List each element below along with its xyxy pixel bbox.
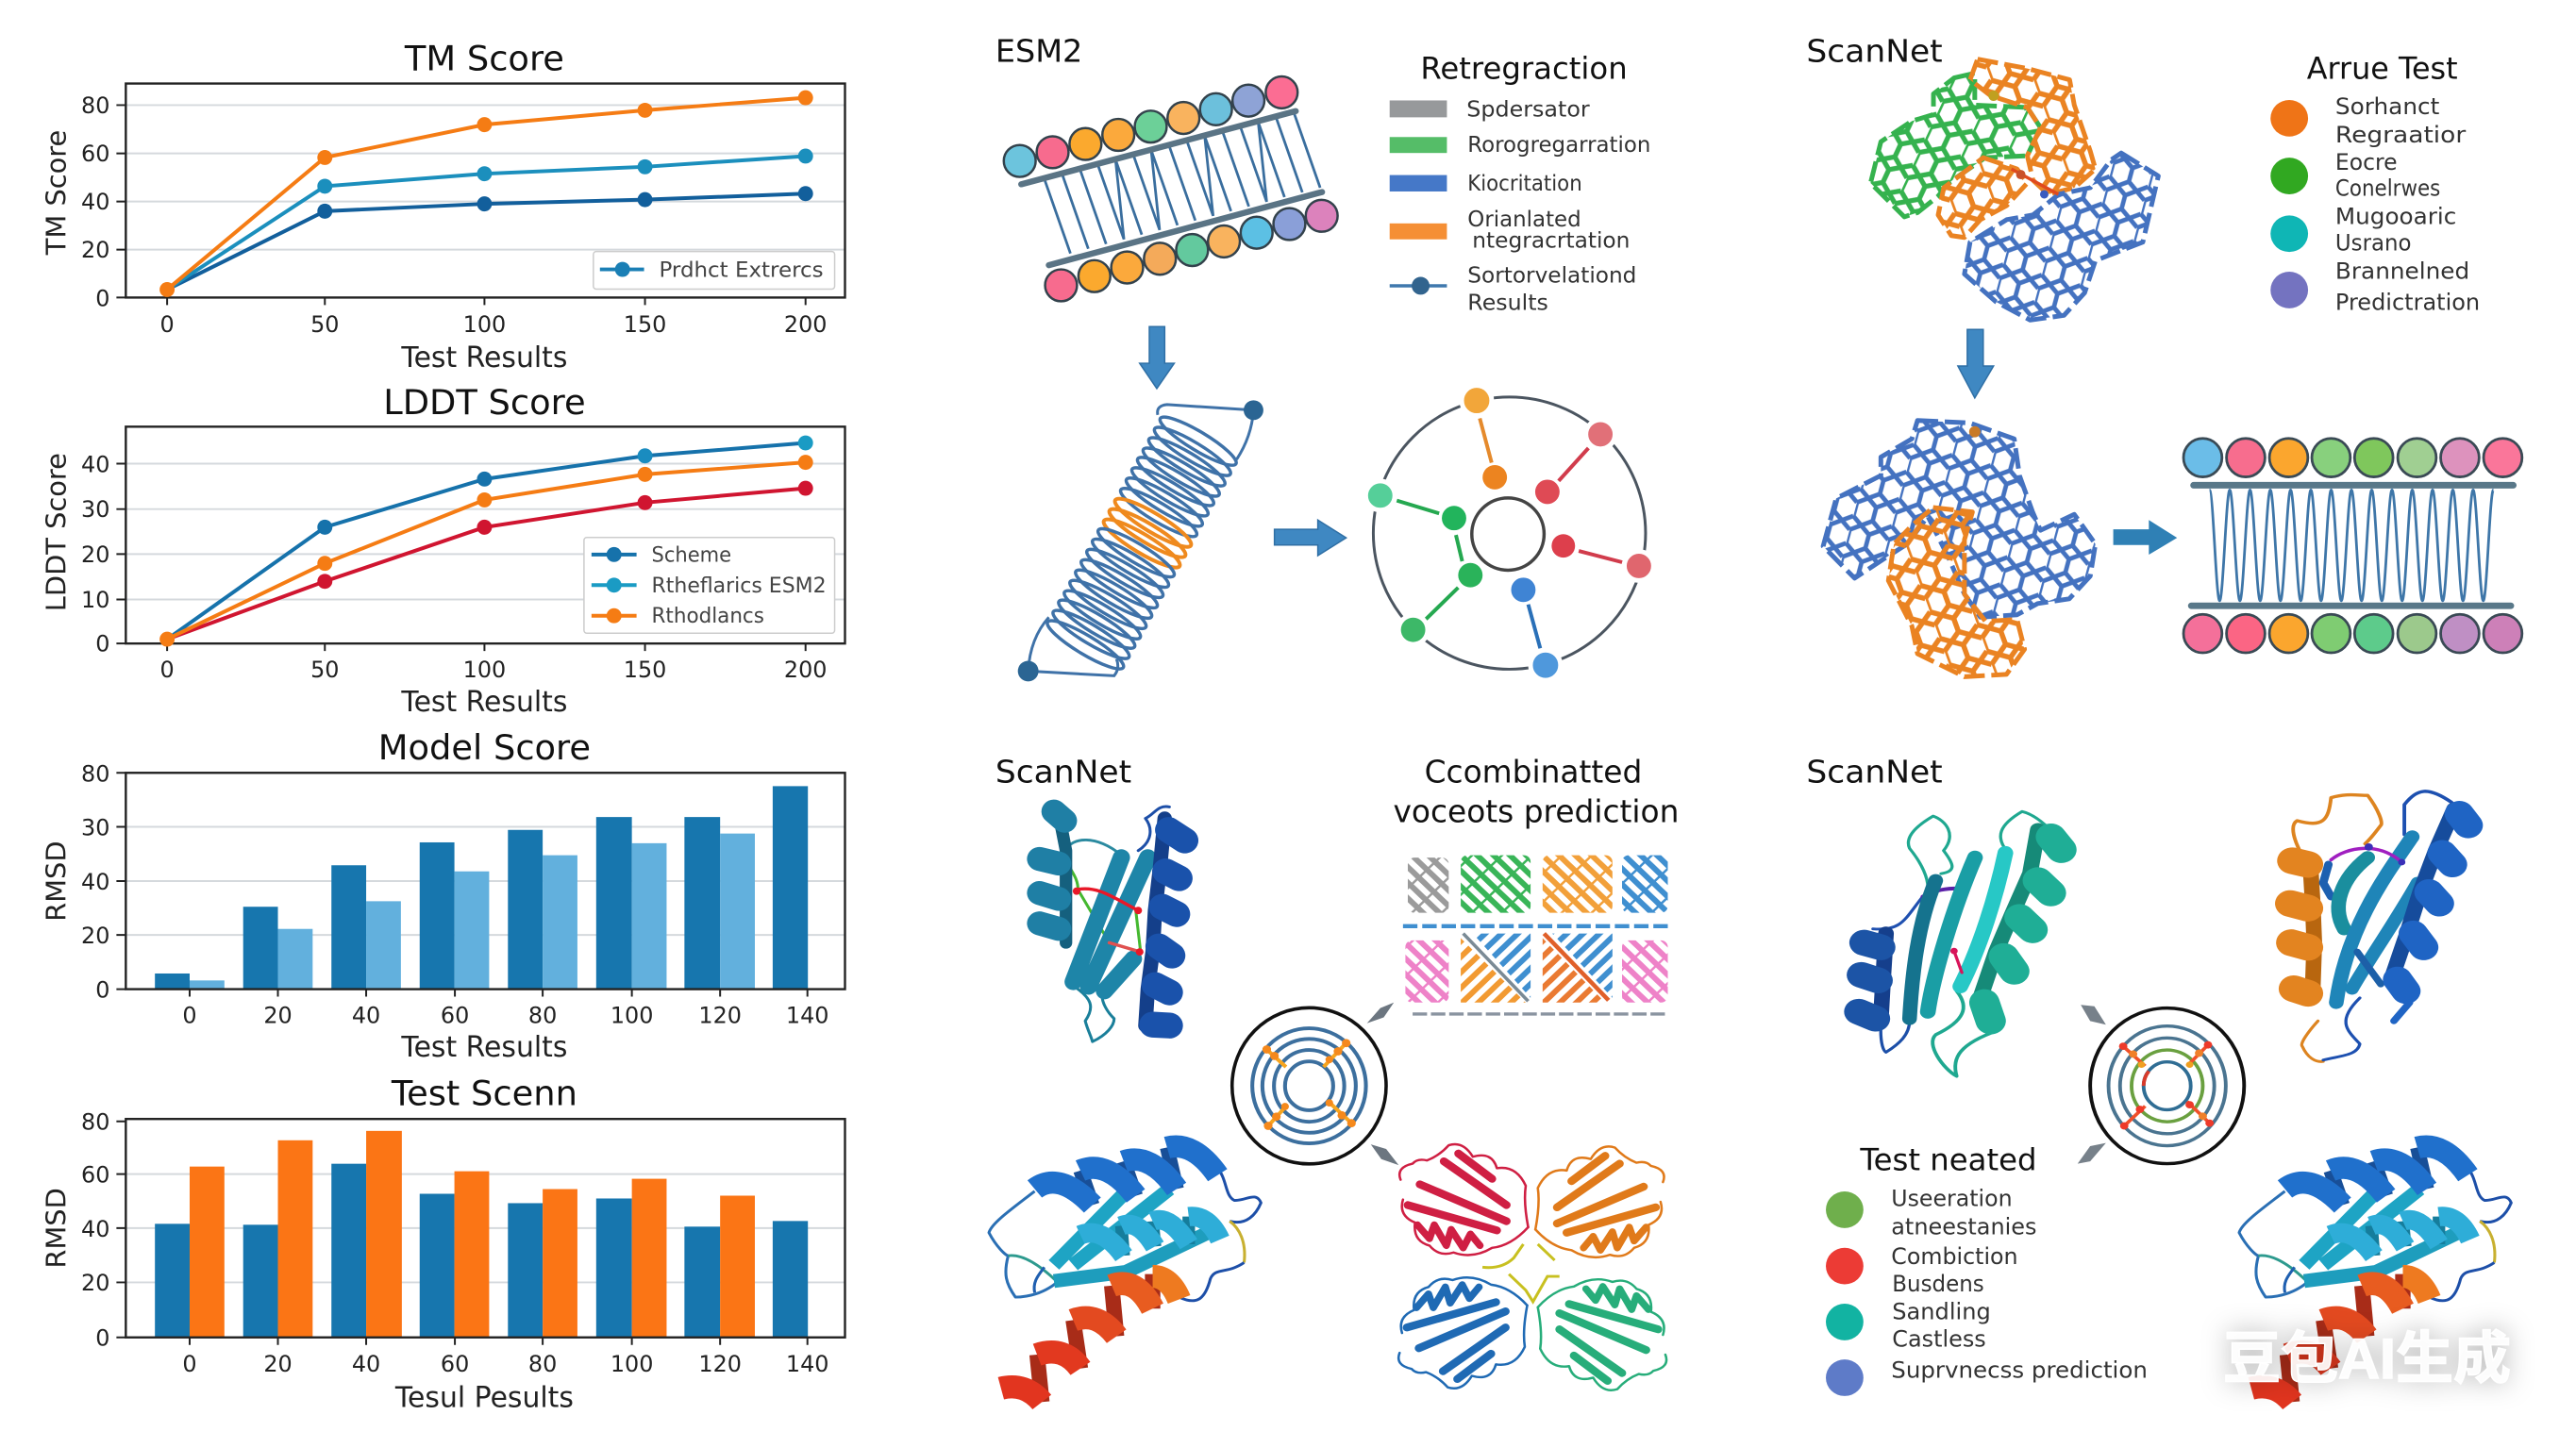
legend: Retregraction: Kiocritation bbox=[1467, 172, 1582, 196]
chart title: LDDT Score: LDDT Score bbox=[383, 382, 586, 423]
legend: Test neated: Busdens bbox=[1892, 1271, 1984, 1297]
chart legend bbox=[594, 252, 835, 289]
arrow: right bbox=[1275, 520, 1347, 556]
y axis tick labels: 10 bbox=[81, 587, 109, 613]
diagram: tilted bead ladder bbox=[1004, 76, 1338, 301]
y axis tick labels bbox=[81, 761, 109, 1004]
series: orange line bbox=[159, 455, 813, 647]
y axis tick labels bbox=[81, 1108, 109, 1352]
heading: Ccombinatted voceots prediction bbox=[1393, 755, 1679, 829]
protein ribbon: teal and blue sheet bbox=[1859, 811, 2062, 1076]
x axis tick labels: 200 bbox=[784, 311, 827, 338]
legend: Arrue Test: Arrue Test bbox=[2307, 51, 2458, 87]
panel: ESM2 pipeline bbox=[995, 34, 1653, 681]
legend: Arrue Test: Conelrwes bbox=[2335, 175, 2440, 201]
legend: Test neated: Sandling bbox=[1892, 1299, 1991, 1325]
heading: ScanNet: ScanNet bbox=[1806, 34, 1943, 70]
series: blue line bbox=[167, 436, 813, 640]
y axis tick labels: 60 bbox=[81, 141, 109, 167]
chart legend: Rthodlancs bbox=[652, 605, 764, 628]
y axis tick labels: 40 bbox=[81, 869, 109, 895]
arrow: down bbox=[1958, 329, 1994, 398]
legend: Retregraction: Retregraction bbox=[1420, 51, 1628, 87]
connector diamond: to tetramer bbox=[1371, 1144, 1398, 1165]
chart: Model Score bar chart bbox=[41, 727, 845, 1064]
legend: Test neated: Test neated bbox=[1859, 1142, 2037, 1178]
y axis tick labels: 0 bbox=[95, 977, 109, 1004]
x axis tick labels: 150 bbox=[624, 311, 666, 338]
x axis tick labels: 50 bbox=[310, 657, 339, 683]
x axis tick labels: 80 bbox=[528, 1351, 557, 1377]
chart legend: Scheme bbox=[652, 544, 731, 568]
panel: ScanNet combined voxel prediction bbox=[989, 755, 1679, 1402]
x axis label: Test Results bbox=[400, 686, 567, 719]
panel: ScanNet ribbons and Test neated bbox=[1806, 755, 2511, 1402]
legend: Test neated: Suprvnecss prediction bbox=[1891, 1357, 2148, 1384]
x axis tick labels: 140 bbox=[786, 1351, 828, 1377]
x axis tick labels: 60 bbox=[441, 1002, 469, 1028]
legend: Arrue Test: Predictration bbox=[2335, 289, 2480, 315]
protein tetramer bbox=[1398, 1144, 1666, 1390]
legend: Arrue Test: Usrano bbox=[2335, 230, 2412, 257]
series: orange line bbox=[159, 91, 813, 297]
x axis tick labels: 120 bbox=[698, 1351, 742, 1377]
blue bars bbox=[155, 1164, 808, 1338]
y axis tick labels: 0 bbox=[95, 1325, 109, 1352]
x axis tick labels: 100 bbox=[463, 657, 506, 683]
y axis tick labels: 40 bbox=[81, 451, 109, 477]
protein ribbon: teal and blue helices bbox=[1040, 807, 1185, 1041]
x axis tick labels: 0 bbox=[160, 311, 175, 338]
legend: Retregraction: Sortorvelationd bbox=[1467, 263, 1636, 288]
protein ribbon: orange and blue sheet bbox=[2290, 791, 2468, 1061]
legend: Arrue Test: Eocre bbox=[2335, 149, 2398, 175]
y axis tick labels: 20 bbox=[81, 237, 109, 263]
x axis tick labels: 80 bbox=[528, 1002, 557, 1028]
diagram: straight bead ladder bbox=[2183, 439, 2522, 653]
legend: Test neated: atneestanies bbox=[1891, 1214, 2037, 1240]
chart legend: Prdhct Extrercs bbox=[659, 259, 824, 283]
x axis tick labels: 20 bbox=[263, 1002, 293, 1028]
y axis tick labels: 20 bbox=[81, 1270, 109, 1296]
y axis tick labels: 0 bbox=[95, 285, 109, 311]
y axis tick labels: 40 bbox=[81, 1216, 109, 1242]
x axis tick labels bbox=[182, 1351, 828, 1377]
x axis tick labels: 140 bbox=[786, 1002, 828, 1028]
x axis tick labels: 120 bbox=[698, 1002, 742, 1028]
x axis tick labels: 0 bbox=[182, 1351, 197, 1377]
target rings icon bbox=[1232, 1007, 1386, 1164]
x axis tick labels: 0 bbox=[182, 1002, 197, 1028]
y axis tick labels: 20 bbox=[81, 541, 109, 568]
heading: ScanNet: ScanNet bbox=[995, 755, 1131, 791]
x axis tick labels: 40 bbox=[352, 1351, 380, 1377]
series: teal line bbox=[167, 149, 813, 290]
x axis tick labels: 100 bbox=[611, 1002, 653, 1028]
protein ribbon: blue, cyan and red copy bbox=[2239, 1146, 2511, 1402]
orange bars bbox=[190, 1131, 755, 1338]
diagram: multicolour protein mesh bbox=[1870, 59, 2158, 320]
diagram: blue and orange protein mesh bbox=[1823, 421, 2096, 676]
light blue bars bbox=[190, 834, 755, 990]
hatch tile grid bbox=[1403, 856, 1667, 1014]
connector diamond: upper bbox=[2081, 1005, 2106, 1024]
x axis tick labels: 60 bbox=[441, 1351, 469, 1377]
diagram: coil helix bbox=[1018, 400, 1263, 681]
legend: Retregraction: Results bbox=[1467, 291, 1548, 315]
connector diamond: lower bbox=[2078, 1143, 2106, 1164]
legend: Arrue Test: Brannelned bbox=[2335, 258, 2469, 285]
x axis tick labels: 20 bbox=[263, 1351, 293, 1377]
x axis tick labels bbox=[160, 311, 827, 338]
legend: Test neated: Useeration bbox=[1891, 1185, 2013, 1211]
arrow: right bbox=[2114, 520, 2177, 555]
legend: Arrue Test: Regraatior bbox=[2335, 122, 2466, 148]
x axis tick labels: 200 bbox=[784, 657, 827, 683]
x axis tick labels: 100 bbox=[611, 1351, 653, 1377]
x axis tick labels: 150 bbox=[624, 657, 666, 683]
chart: LDDT Score line chart bbox=[41, 382, 845, 719]
chart: Test Scenn bar chart bbox=[41, 1073, 845, 1414]
x axis label: Test Results bbox=[400, 341, 567, 374]
x axis tick labels bbox=[182, 1002, 828, 1028]
y axis label: LDDT Score bbox=[41, 453, 73, 611]
y axis tick labels: 20 bbox=[81, 923, 109, 949]
x axis label: Tesul Pesults bbox=[394, 1381, 574, 1414]
heading: ESM2: ESM2 bbox=[995, 34, 1082, 70]
legend: Arrue Test bbox=[2270, 51, 2480, 315]
x axis tick labels: 40 bbox=[352, 1002, 380, 1028]
x axis label: Test Results bbox=[400, 1031, 567, 1064]
y axis tick labels: 40 bbox=[81, 189, 109, 215]
y axis label: TM Score bbox=[41, 130, 73, 256]
legend: Retregraction: ntegracrtation bbox=[1472, 229, 1630, 254]
chart legend: Rtheflarics ESM2 bbox=[652, 574, 827, 598]
watermark: 豆包AI生成 bbox=[2223, 1327, 2511, 1390]
chart title: Test Scenn: Test Scenn bbox=[391, 1073, 577, 1113]
y axis tick labels: 80 bbox=[81, 761, 109, 788]
legend: Retregraction: Spdersator bbox=[1466, 97, 1590, 122]
legend: Arrue Test: Sorhanct bbox=[2335, 93, 2439, 120]
x axis tick labels bbox=[160, 657, 827, 683]
series: red line bbox=[167, 481, 813, 640]
legend: Test neated: Castless bbox=[1892, 1326, 1986, 1353]
series: dark blue line bbox=[167, 186, 813, 290]
legend: Test neated: Combiction bbox=[1891, 1243, 2018, 1270]
y axis tick labels: 80 bbox=[81, 1108, 109, 1135]
y axis tick labels bbox=[81, 451, 109, 657]
heading: ScanNet: ScanNet bbox=[1806, 755, 1943, 791]
y axis tick labels: 80 bbox=[81, 92, 109, 119]
y axis label: RMSD bbox=[41, 1188, 73, 1269]
legend: Arrue Test: Mugooaric bbox=[2335, 204, 2456, 230]
connector diamond: to tiles bbox=[1367, 1003, 1394, 1024]
legend: Retregraction bbox=[1390, 51, 1650, 315]
y axis label: RMSD bbox=[41, 841, 73, 922]
chart: TM Score line chart bbox=[41, 39, 845, 374]
arrow: down bbox=[1140, 326, 1174, 389]
heading: Ccombinatted voceots prediction: Ccombinatted bbox=[1425, 755, 1642, 791]
legend: Test neated bbox=[1826, 1142, 2148, 1396]
y axis tick labels bbox=[81, 92, 109, 311]
heading: Ccombinatted voceots prediction: voceots prediction bbox=[1393, 793, 1679, 829]
y axis tick labels: 30 bbox=[81, 814, 109, 841]
dark blue bars bbox=[155, 786, 808, 990]
x axis tick labels: 50 bbox=[310, 311, 339, 338]
y axis tick labels: 30 bbox=[81, 496, 109, 523]
protein ribbon: blue, cyan and red bbox=[989, 1146, 1261, 1402]
x axis tick labels: 100 bbox=[463, 311, 506, 338]
y axis tick labels: 0 bbox=[95, 631, 109, 657]
chart title: Model Score: Model Score bbox=[378, 727, 591, 768]
y axis tick labels: 60 bbox=[81, 1162, 109, 1189]
x axis tick labels: 0 bbox=[160, 657, 175, 683]
diagram: circular network bbox=[1365, 386, 1653, 680]
panel: ScanNet mesh pipeline bbox=[1806, 34, 2522, 676]
legend: Retregraction: Rorogregarration bbox=[1467, 133, 1650, 158]
chart title: TM Score: TM Score bbox=[404, 39, 564, 79]
legend: Retregraction: Orianlated bbox=[1467, 208, 1581, 232]
chart legend bbox=[584, 538, 835, 633]
target rings icon bbox=[2090, 1008, 2244, 1164]
